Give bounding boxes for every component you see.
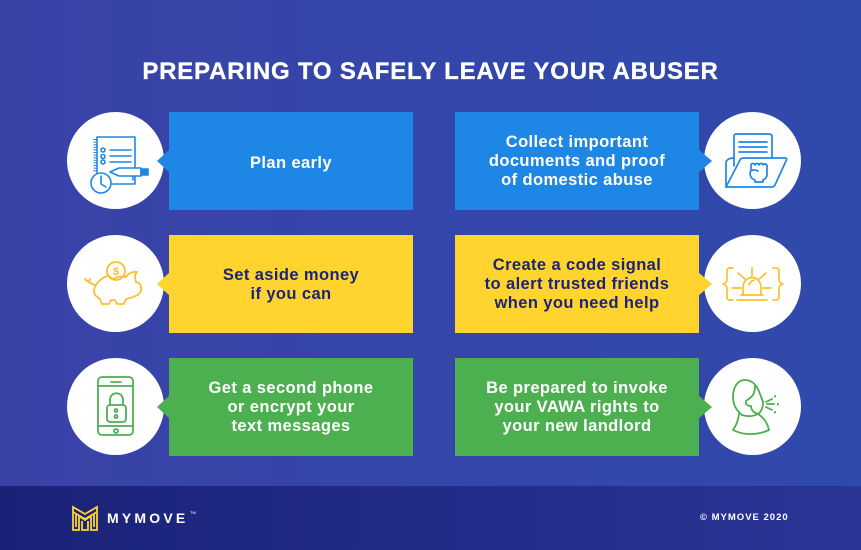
box: second phone: Get a second phone <box>209 378 373 396</box>
box: collect documents <box>455 112 699 210</box>
box: VAWA rights: Be prepared to invoke <box>486 378 668 396</box>
box: VAWA rights: your new landlord <box>503 416 651 434</box>
circle: money <box>67 235 164 332</box>
circle: phone <box>67 358 164 455</box>
box: set aside money: if you can <box>250 285 332 303</box>
box: VAWA rights <box>455 358 699 456</box>
logo <box>72 505 196 531</box>
box: set aside money: Set aside money <box>223 266 359 284</box>
box: plan early: Plan early <box>250 154 332 172</box>
box: second phone <box>169 358 413 456</box>
box: collect documents: documents and proof <box>489 152 665 170</box>
circle: VAWA rights <box>704 358 801 455</box>
copyright: © MYMOVE 2020 <box>700 512 789 523</box>
box: VAWA rights: your VAWA rights to <box>494 398 660 416</box>
box: collect documents: Collect important <box>506 132 648 150</box>
box: set aside money <box>169 235 413 333</box>
box: plan early <box>169 112 413 210</box>
icon: piggy bank: $ <box>113 266 119 278</box>
box: second phone: or encrypt your <box>227 398 355 416</box>
circle: plan early <box>67 112 164 209</box>
trademark mark: TM <box>190 510 196 515</box>
title: PREPARING TO SAFELY LEAVE YOUR ABUSER <box>142 58 719 85</box>
box: collect documents: of domestic abuse <box>501 170 653 188</box>
footer band <box>0 486 861 550</box>
circle: code signal <box>704 235 801 332</box>
logo mark <box>73 507 97 530</box>
box: code signal <box>455 235 699 333</box>
logo wordmark: MYMOVE <box>107 510 188 526</box>
circle: documents <box>704 112 801 209</box>
box: code signal: to alert trusted friends <box>485 274 669 292</box>
box: second phone: text messages <box>232 416 350 434</box>
box: code signal: when you need help <box>495 294 659 312</box>
box: code signal: Create a code signal <box>493 256 661 274</box>
